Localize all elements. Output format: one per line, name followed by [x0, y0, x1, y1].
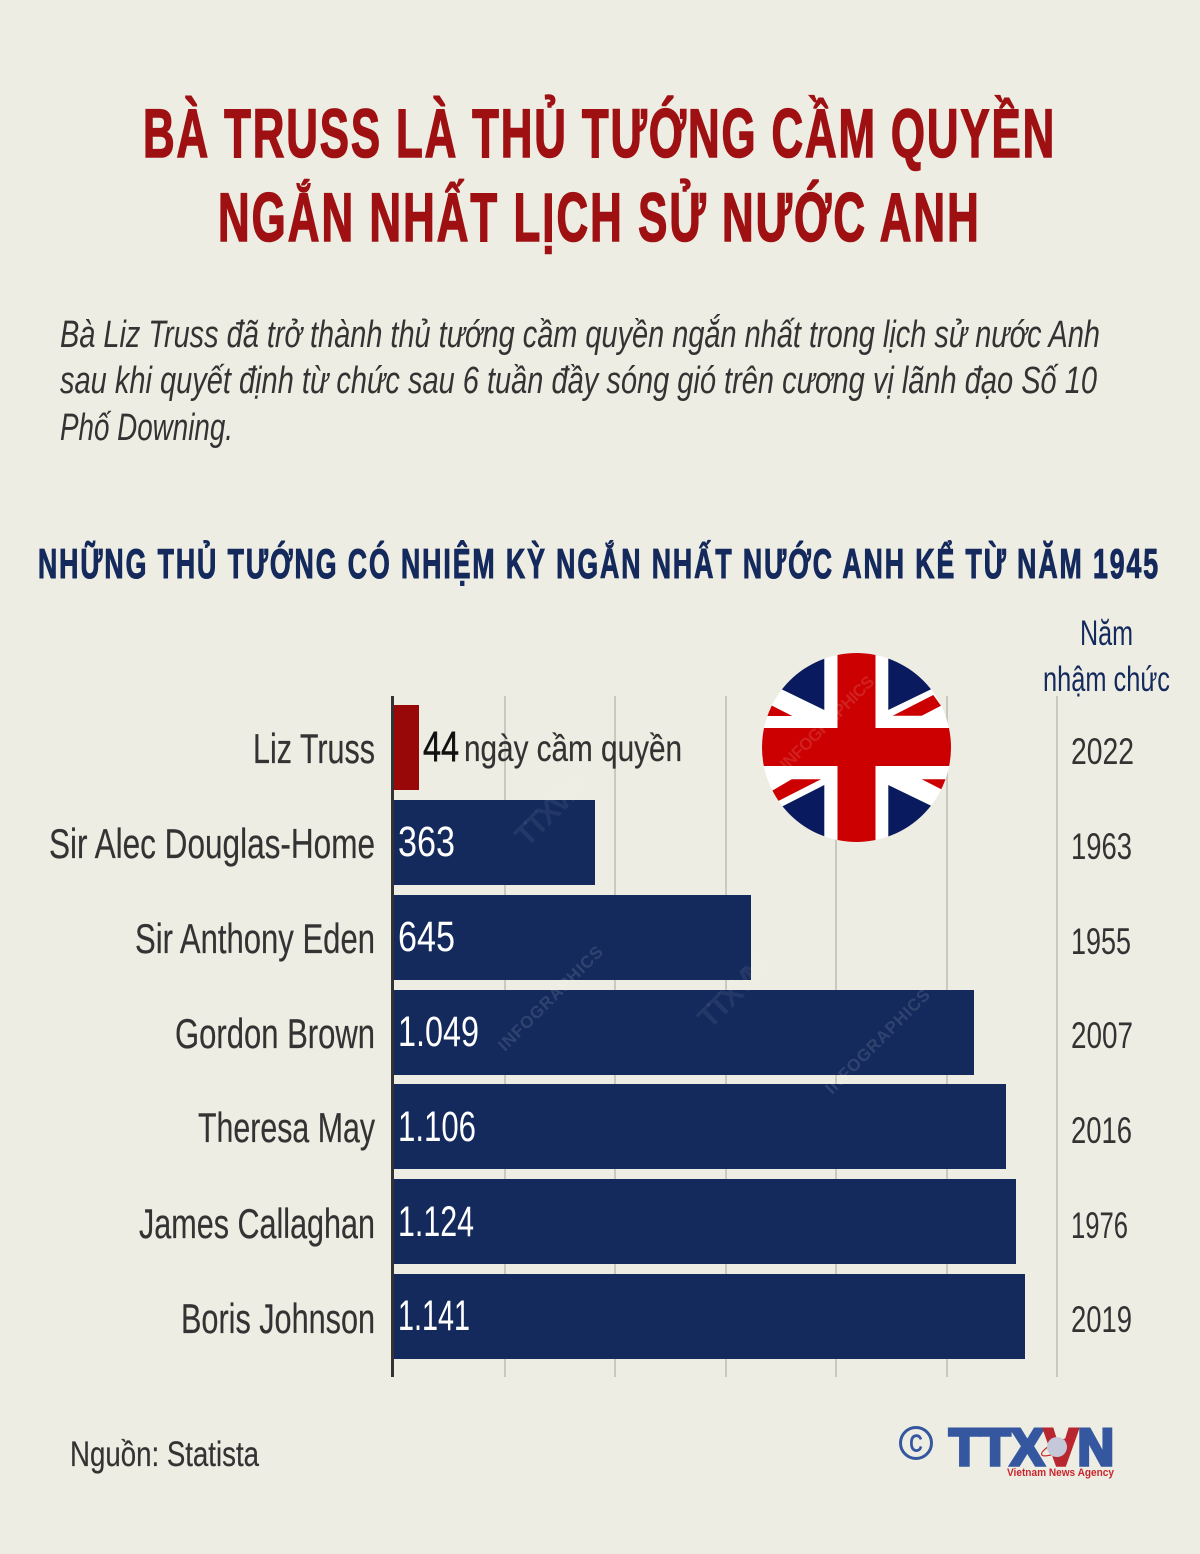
title	[143, 95, 1054, 257]
watermarks: TTXVN	[692, 952, 775, 1035]
watermarks: INFOGRAPHICS	[494, 942, 607, 1055]
callout: 44 days in office: ngày cầm quyền	[464, 728, 682, 769]
column heading: year in office	[1043, 614, 1170, 699]
watermarks: INFOGRAPHICS	[776, 672, 878, 774]
value labels: 1.106	[398, 1103, 476, 1151]
watermarks	[494, 672, 934, 1098]
logo: TTXVN: TTXVN	[949, 1419, 1114, 1477]
name labels: Liz Truss	[253, 725, 375, 772]
name labels	[49, 725, 375, 1342]
source note: Nguồn: Statista	[70, 1435, 259, 1474]
bar chart	[49, 696, 1134, 1377]
icon: UK flag	[762, 653, 951, 842]
value labels: 363	[398, 818, 455, 866]
callout: 44 days in office	[423, 723, 682, 771]
name labels: Boris Johnson	[181, 1295, 375, 1342]
year labels: 1955	[1071, 921, 1131, 962]
intro text block	[60, 313, 1100, 449]
logo: TTXVN: Vietnam News Agency	[1007, 1467, 1115, 1479]
chart heading: NHỮNG THỦ TƯỚNG CÓ NHIỆM KỲ NGẮN NHẤT NƯỚC ANH KỂ TỪ NĂM 1945	[38, 540, 1158, 588]
name labels: Gordon Brown	[175, 1010, 375, 1057]
value labels: 645	[398, 913, 455, 961]
year labels: 1963	[1071, 826, 1132, 867]
column heading: year in office: Năm	[1080, 614, 1133, 653]
value labels	[398, 818, 479, 1340]
watermarks: TTXVN	[509, 770, 592, 853]
watermarks: INFOGRAPHICS	[821, 985, 934, 1098]
value labels: 1.124	[398, 1198, 474, 1246]
value labels: 1.141	[398, 1292, 470, 1340]
year labels: 1976	[1071, 1205, 1128, 1246]
name labels: James Callaghan	[139, 1200, 375, 1247]
value labels: 1.049	[398, 1008, 479, 1056]
year labels: 2016	[1071, 1110, 1132, 1151]
name labels: Sir Anthony Eden	[135, 915, 375, 962]
title: NGẮN NHẤT LỊCH SỬ NƯỚC ANH	[218, 179, 979, 257]
year labels: 2022	[1071, 731, 1134, 772]
logo: TTXVN: C	[909, 1429, 923, 1458]
name labels: Theresa May	[198, 1104, 375, 1151]
bars	[393, 705, 1025, 1359]
name labels: Sir Alec Douglas-Home	[49, 820, 375, 867]
title: BÀ TRUSS LÀ THỦ TƯỚNG CẦM QUYỀN	[143, 95, 1054, 173]
intro text block: Phố Downing.	[60, 407, 233, 449]
year labels	[1071, 731, 1134, 1340]
year labels: 2019	[1071, 1299, 1132, 1340]
year labels: 2007	[1071, 1015, 1133, 1056]
callout: 44 days in office: 44	[423, 723, 459, 771]
